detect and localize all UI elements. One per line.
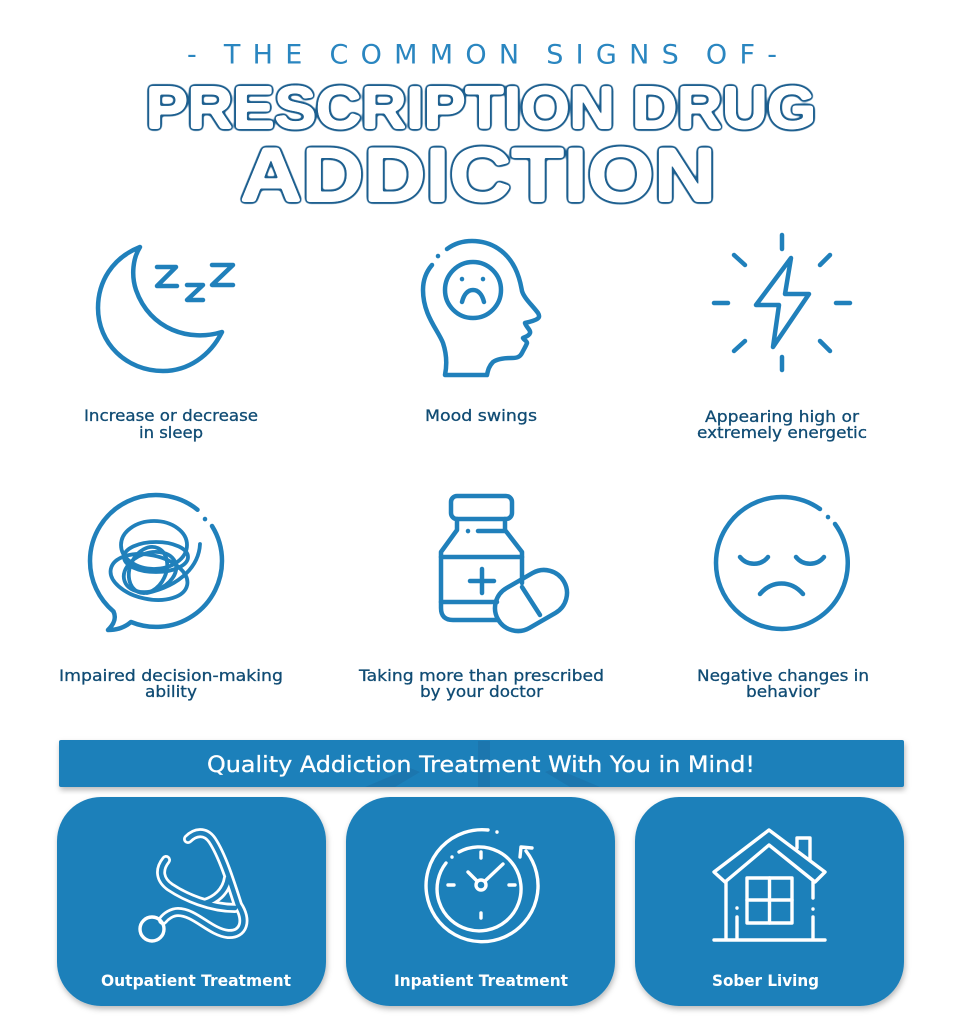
sign: sleep [84, 247, 258, 442]
banner [59, 740, 904, 787]
card: inpatient treatment [346, 797, 615, 1006]
title line: prescription drug: PRESCRIPTION DRUG [146, 75, 816, 141]
label: in sleep [139, 423, 203, 442]
sign: high or energetic [697, 235, 867, 442]
icon: clock with arrow [426, 830, 538, 942]
sign: negative behavior changes [697, 497, 869, 701]
label: ability [145, 682, 197, 701]
label: Appearing high or [705, 407, 859, 426]
icon: stethoscope [140, 833, 243, 941]
card: outpatient treatment [57, 797, 326, 1006]
icon: head with sad face [423, 241, 539, 375]
title line: addiction: ADDICTION [240, 133, 716, 218]
label: Outpatient Treatment [101, 971, 291, 990]
icon: lightning bolt with rays [714, 235, 850, 370]
sign: mood swings [423, 241, 539, 425]
label: extremely energetic [697, 423, 867, 442]
subtitle: - THE COMMON SIGNS OF- [187, 40, 777, 70]
label: behavior [746, 682, 820, 701]
icon: medicine bottle and capsule [441, 496, 575, 639]
icon: house [714, 830, 825, 940]
label: by your doctor [420, 682, 543, 701]
sign: taking more than prescribed [358, 496, 604, 701]
title [146, 40, 816, 218]
sign: impaired decision-making [59, 495, 283, 701]
label: Increase or decrease [84, 406, 258, 425]
icon: speech bubble with scribble [90, 495, 222, 630]
label: Taking more than prescribed [358, 666, 604, 685]
banner text: Quality Addiction Treatment With You in Mind! [207, 753, 755, 778]
icon: sad face with closed eyes [716, 497, 848, 629]
label: Negative changes in [697, 666, 869, 685]
label: Sober Living [712, 971, 819, 990]
label: Inpatient Treatment [394, 971, 568, 990]
card: sober living [635, 797, 904, 1006]
icon: moon and z letters [98, 247, 233, 371]
label: Mood swings [425, 406, 537, 425]
label: Impaired decision-making [59, 666, 283, 685]
